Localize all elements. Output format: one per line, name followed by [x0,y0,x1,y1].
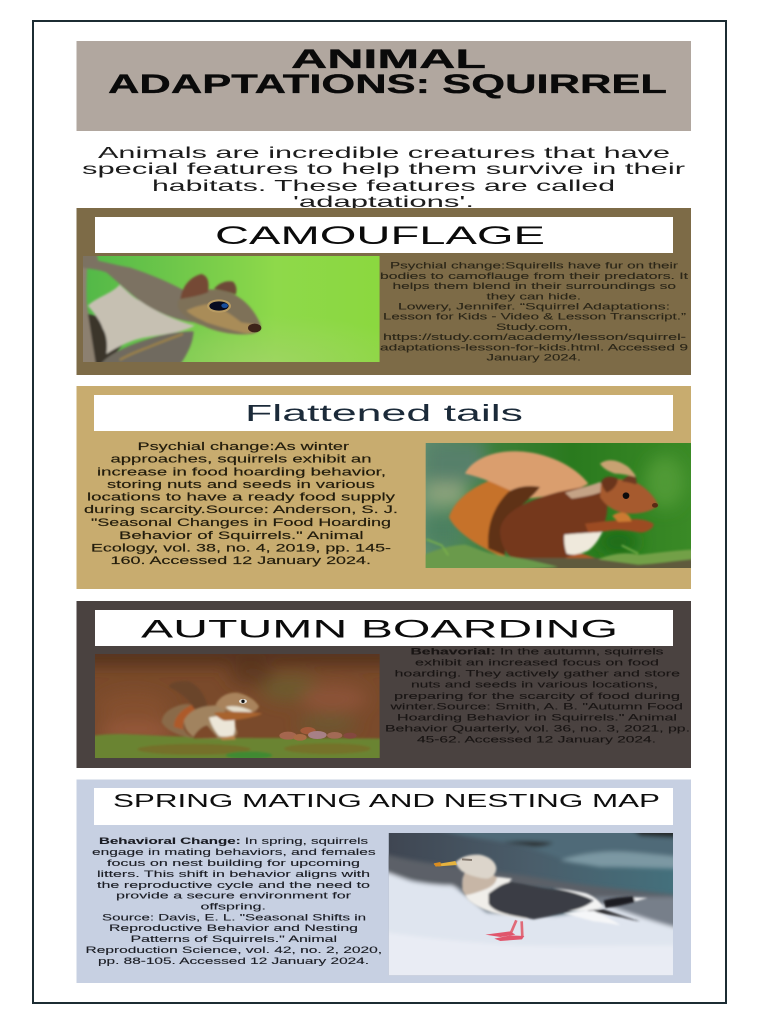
text block: autumn boarding: Behavorial: In the autumn, squirrels [410,646,664,658]
text block: autumn boarding [385,646,690,746]
intro text: special features to help them survive in their [82,161,686,178]
text block: autumn boarding: winter.Source: Smith, A. B. "Autumn Food [389,702,683,712]
text block: autumn boarding: preparing for the scarcity of food during [394,691,680,702]
text block: spring mating: pp. 88-105. Accessed 12 January 2024. [98,956,369,967]
text block: flattened tails: Psychial change:As winter [138,441,350,453]
text block: camouflage: they can hide. [486,290,581,302]
text block: flattened tails: Ecology, vol. 38, no. 4, 2019, pp. 145- [91,542,392,554]
text block: autumn boarding: hoarding. They actively gather and store [394,668,680,680]
text block: spring mating: the reproductive cycle and the need to [97,880,370,891]
heading bar: camouflage: CAMOUFLAGE [215,222,545,250]
text block: spring mating: Reproductive Behavior and Nesting [109,923,358,934]
text block: flattened tails: approaches, squirrels exhibit an [110,454,372,466]
text block: spring mating: provide a secure environment for [116,890,352,902]
intro text: habitats. These features are called [152,178,615,195]
photo: gull on snow [388,833,673,976]
text block: camouflage: helps them blend in their surroundings so [392,280,676,291]
text block: autumn boarding: 45-62. Accessed 12 January 2024. [417,734,656,746]
photo: red squirrel [426,443,691,568]
text block: camouflage: Lowery, Jennifer. “Squirrel Adaptations: [398,300,670,312]
text block: flattened tails [84,441,398,567]
text block: camouflage: Lesson for Kids - Video & Lesson Transcript.” [383,310,686,322]
text block: spring mating: Source: Davis, E. L. "Seasonal Shifts in [102,912,366,924]
text block: camouflage: January 2024. [486,352,581,362]
heading bar: autumn boarding [95,610,673,646]
panel: flattened tails [76,386,698,589]
nuts [279,727,357,741]
panel: autumn boarding [76,601,691,768]
title text [108,44,667,99]
text block: autumn boarding: Hoarding Behavior in Squirrels." Animal [397,712,677,724]
intro text: Animals are incredible creatures that have [98,145,670,162]
text block: flattened tails: increase in food hoarding behavior, [97,466,386,478]
title banner [76,41,691,131]
text block: camouflage [380,260,689,362]
text block: autumn boarding: exhibit an increased focus on food [415,658,659,668]
text block: camouflage: https://study.com/academy/lesson/squirrel- [383,331,686,342]
text block: flattened tails: storing nuts and seeds in various [107,479,375,491]
text block: flattened tails: 160. Accessed 12 January 2024. [110,555,371,567]
heading bar: spring mating: SPRING MATING AND NESTING MAP [113,791,660,811]
panel: camouflage [73,208,691,375]
title text: ADAPTATIONS: SQUIRREL [108,69,667,99]
text block: camouflage: bodies to camoflauge from their predators. It [380,270,689,281]
text block: camouflage: adaptations-lesson-for-kids.html. Accessed 9 [380,342,688,352]
photo: grey squirrel on tree [83,256,380,362]
intro text [82,145,686,211]
intro text: 'adaptations'. [293,194,474,211]
text block: spring mating [86,836,382,967]
panel: spring mating and nesting [76,780,691,983]
text block: spring mating: Behavioral Change: In spring, squirrels [99,836,368,847]
text block: camouflage: Psychial change:Squirells have fur on their [390,260,678,270]
text block: flattened tails: "Seasonal Changes in Food Hoarding [91,517,391,529]
title text: ANIMAL [291,44,486,74]
text block: autumn boarding: Behavior Quarterly, vol. 36, no. 3, 2021, pp. [385,724,690,734]
text block: spring mating: Reproduction Science, vol. 42, no. 2, 2020, [86,945,382,956]
heading bar: flattened tails [94,395,673,431]
text block: flattened tails: during scarcity.Source: Anderson, S. J. [84,504,398,516]
text block: autumn boarding: nuts and seeds in various locations, [411,680,658,690]
text block: spring mating: litters. This shift in behavior aligns with [97,869,370,880]
text block: flattened tails: locations to have a ready food supply [87,492,396,504]
text block: spring mating: focus on nest building for upcoming [107,858,360,869]
heading bar: autumn boarding: AUTUMN BOARDING [141,616,618,644]
heading bar: flattened tails: Flattened tails [245,400,523,426]
heading bar: camouflage [95,217,673,253]
text block: flattened tails: Behavior of Squirrels." Animal [119,530,364,542]
text block: spring mating: engage in mating behaviors, and females [92,847,376,858]
text block: spring mating: offspring. [200,902,266,912]
heading bar: spring mating [94,788,673,825]
text block: spring mating: Patterns of Squirrels." Animal [130,934,337,945]
photo: squirrel with nuts [95,654,380,758]
text block: camouflage: Study.com, [496,321,572,332]
